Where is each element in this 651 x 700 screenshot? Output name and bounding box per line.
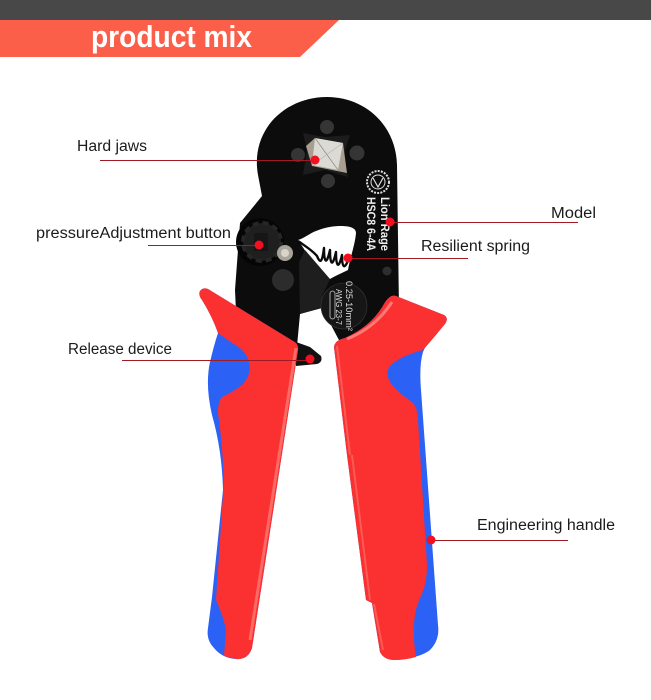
callout: pressureAdjustment button <box>36 225 264 250</box>
model text: HSC8 6-4A <box>364 197 378 251</box>
awg text: AWG 23-7 <box>334 289 343 326</box>
brand text: Lion Rage <box>378 197 392 251</box>
screw <box>277 245 293 261</box>
callout: pressureAdjustment button: pressureAdjustment button <box>36 225 231 242</box>
spring <box>298 241 349 266</box>
bolts <box>291 120 364 188</box>
round crimp end <box>321 283 367 329</box>
rivet <box>382 266 392 276</box>
lower arm plate <box>299 250 330 314</box>
callout: Hard jaws: Hard jaws <box>77 138 147 155</box>
pin <box>272 269 294 291</box>
right handle <box>334 296 447 660</box>
title banner <box>0 19 339 57</box>
callout: Model: Model <box>551 205 596 222</box>
top dark bar <box>0 0 651 20</box>
callout: Resilient spring: Resilient spring <box>421 238 530 255</box>
callout: Release device: Release device <box>68 341 172 358</box>
left handle <box>199 288 298 659</box>
brand logo <box>367 171 389 193</box>
release lever <box>296 342 322 366</box>
crimp slot icon <box>330 291 335 319</box>
pressure adjustment gear <box>236 218 284 266</box>
jaw <box>303 133 350 177</box>
crimping tool <box>199 97 447 660</box>
black tool body <box>235 97 399 366</box>
callout: Model <box>386 205 596 226</box>
callout: Resilient spring <box>344 238 530 262</box>
callout: Hard jaws <box>77 138 320 164</box>
size text: 0.25-10mm² <box>343 281 354 331</box>
callout: Engineering handle <box>426 517 615 544</box>
callout: Engineering handle: Engineering handle <box>477 517 615 534</box>
title banner: product mix <box>91 19 253 54</box>
callout: Release device <box>68 341 314 364</box>
spring opening <box>298 226 356 279</box>
